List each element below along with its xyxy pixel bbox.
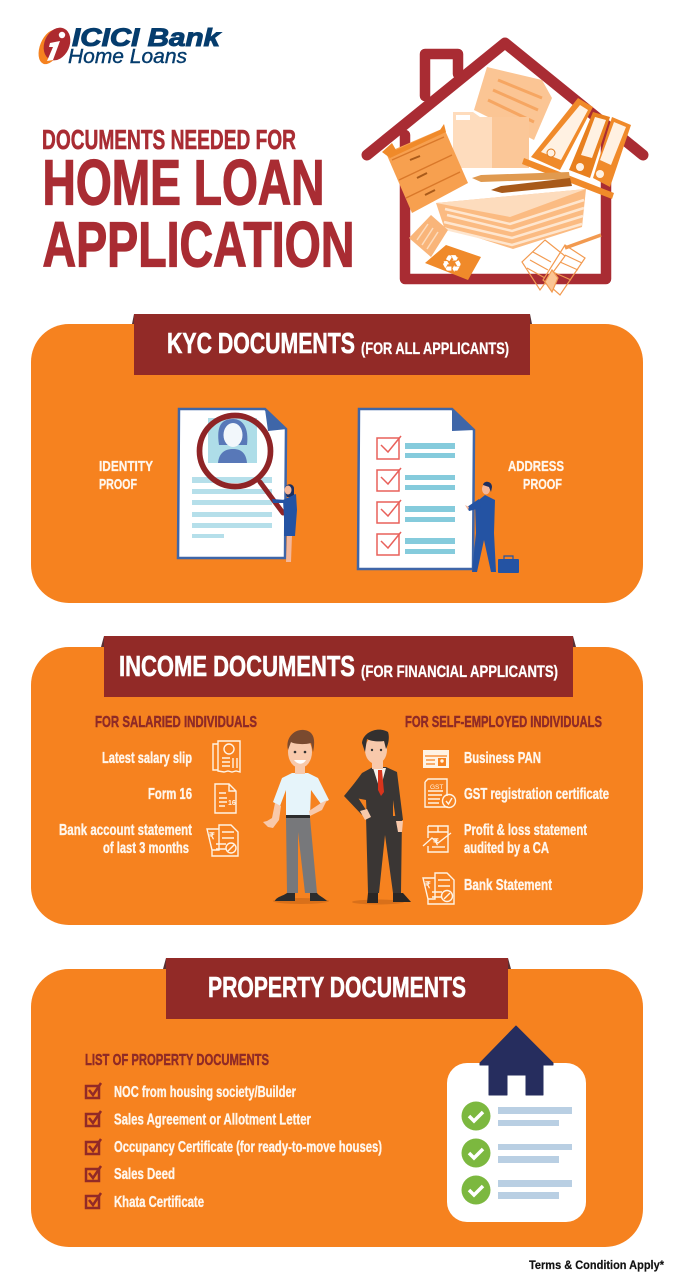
property documents list (85, 1052, 382, 1211)
property documents list: Sales Agreement or Allotment Letter (114, 1112, 311, 1128)
panel: property documents (31, 958, 643, 1247)
filing cabinet (382, 124, 468, 213)
icon: check boxes (86, 1083, 101, 1208)
salaried column (59, 714, 257, 857)
property documents list: Khata Certificate (114, 1194, 204, 1211)
salaried column: Latest salary slip (102, 750, 192, 767)
panel: KYC documents (31, 314, 643, 603)
icon: salary slip (213, 741, 240, 772)
icon: PAN card (423, 750, 449, 768)
label: address proof: ADDRESS (508, 458, 564, 475)
recycling box (425, 245, 481, 280)
icon: bank statement (207, 825, 238, 856)
header banner: (FOR ALL APPLICANTS) (361, 339, 509, 358)
panel: income documents (31, 636, 643, 925)
paper stack (436, 189, 586, 249)
illustration: address checklist document (358, 409, 519, 573)
illustration: salaried man (263, 730, 329, 904)
property documents list: Occupancy Certificate (for ready-to-move houses) (114, 1139, 382, 1156)
header banner: PROPERTY DOCUMENTS (208, 972, 466, 1004)
icon: profit and loss: ₹ (433, 837, 439, 847)
self-employed column: FOR SELF-EMPLOYED INDIVIDUALS (405, 714, 602, 731)
header banner: INCOME DOCUMENTS (119, 651, 355, 683)
title: APPLICATION (42, 208, 354, 280)
icon: form 16 (215, 784, 236, 813)
self-employed column: audited by a CA (464, 840, 549, 857)
man (465, 482, 496, 572)
salaried column: Bank account statement (59, 822, 192, 839)
recycling box: ♻ (441, 250, 463, 278)
self-employed column: GST registration certificate (464, 786, 609, 803)
binders (522, 98, 631, 199)
small document (409, 215, 448, 257)
logo: ICICI Bank Home Loans: Home Loans (68, 46, 187, 68)
panel background (31, 969, 643, 1247)
self-employed column: Profit & loss statement (464, 822, 587, 839)
illustration: house filled with documents (367, 43, 643, 295)
checkboxes (377, 436, 401, 555)
icon: GST certificate: GST (430, 784, 443, 791)
label: address proof: PROOF (523, 476, 562, 493)
pencil and pen (472, 172, 572, 193)
salaried column: FOR SALARIED INDIVIDUALS (95, 714, 257, 731)
illustration: house checklist clipboard (447, 1026, 586, 1222)
panel background (31, 647, 643, 925)
label: identity proof (99, 458, 153, 493)
icon: form 16: 16 (228, 800, 236, 807)
icon: bank statement: ₹ (209, 831, 215, 841)
logo: ICICI Bank Home Loans: ICICI Bank (72, 24, 221, 52)
icon: bank statement document: ₹ (425, 880, 431, 890)
id photo (208, 418, 257, 463)
header banner (132, 314, 532, 375)
label: identity proof: PROOF (99, 476, 137, 493)
salaried column: of last 3 months (103, 840, 189, 857)
woman (272, 484, 297, 562)
property documents list: Sales Deed (114, 1166, 175, 1183)
header banner (163, 958, 511, 1019)
icon: GST certificate (425, 779, 456, 808)
briefcase (498, 556, 519, 573)
logo: ICICI Bank Home Loans (34, 23, 221, 68)
header banner (101, 636, 576, 697)
title (42, 124, 354, 280)
icon: bank statement document (423, 873, 454, 904)
self-employed column: Bank Statement (464, 877, 552, 894)
folder (453, 112, 529, 168)
label: identity proof: IDENTITY (99, 458, 153, 475)
magnifying glass (200, 416, 283, 513)
header banner: (FOR FINANCIAL APPLICANTS) (361, 662, 558, 681)
salaried column: Form 16 (148, 786, 192, 803)
check marks (462, 1102, 490, 1204)
self-employed column (405, 714, 609, 904)
illustration: self-employed man (344, 730, 411, 904)
icon: ICICI logo mark (34, 23, 75, 67)
property documents list: LIST OF PROPERTY DOCUMENTS (85, 1052, 269, 1069)
scattered documents and pen (522, 235, 601, 295)
icon: profit and loss (423, 826, 451, 852)
header banner: KYC DOCUMENTS (167, 328, 355, 360)
terms note: Terms & Condition Apply* (529, 1258, 664, 1272)
back papers (474, 67, 552, 140)
panel background (31, 324, 643, 603)
self-employed column: Business PAN (464, 750, 541, 767)
house outline (367, 43, 643, 279)
title: DOCUMENTS NEEDED FOR (42, 124, 296, 155)
icon: navy house (480, 1026, 553, 1095)
label: address proof (508, 458, 564, 493)
title: HOME LOAN (42, 146, 324, 218)
illustration: identity document with magnifier (178, 409, 297, 562)
property documents list: NOC from housing society/Builder (114, 1084, 296, 1101)
